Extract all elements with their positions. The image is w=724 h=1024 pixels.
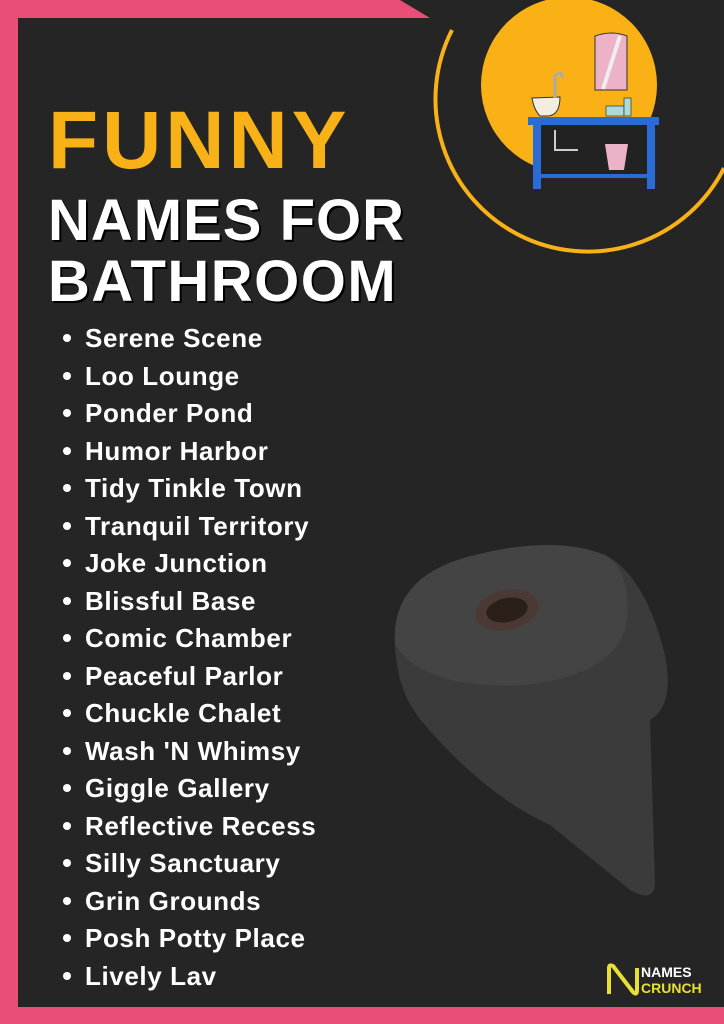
icon: bathroom vanity in circle [433,0,724,254]
logo: NAMES [641,964,692,980]
list of names: Humor Harbor [85,436,268,466]
list of names: Lively Lav [85,960,217,990]
list of names: Peaceful Parlor [85,660,283,690]
list of names [63,323,316,990]
list of names: Tranquil Territory [85,510,309,540]
logo: CRUNCH [641,980,702,996]
title: FUNNY [48,95,350,186]
list of names: Grin Grounds [85,886,261,916]
list of names: Serene Scene [85,323,263,353]
list of names: Joke Junction [85,548,268,578]
list of names: Chuckle Chalet [85,698,281,728]
list of names: Wash 'N Whimsy [85,736,301,766]
icon: toilet paper roll [394,545,668,896]
list of names: Loo Lounge [85,360,240,390]
list of names: Ponder Pond [85,398,253,428]
list of names: Silly Sanctuary [85,848,280,878]
title [48,95,405,314]
logo [607,963,702,996]
list of names: Blissful Base [85,586,256,616]
list of names: Comic Chamber [85,623,292,653]
title: BATHROOM [48,249,397,314]
list of names: Tidy Tinkle Town [85,473,303,503]
list of names: Giggle Gallery [85,773,270,803]
list of names: Posh Potty Place [85,923,306,953]
list of names: Reflective Recess [85,810,316,840]
title: NAMES FOR [48,188,405,253]
